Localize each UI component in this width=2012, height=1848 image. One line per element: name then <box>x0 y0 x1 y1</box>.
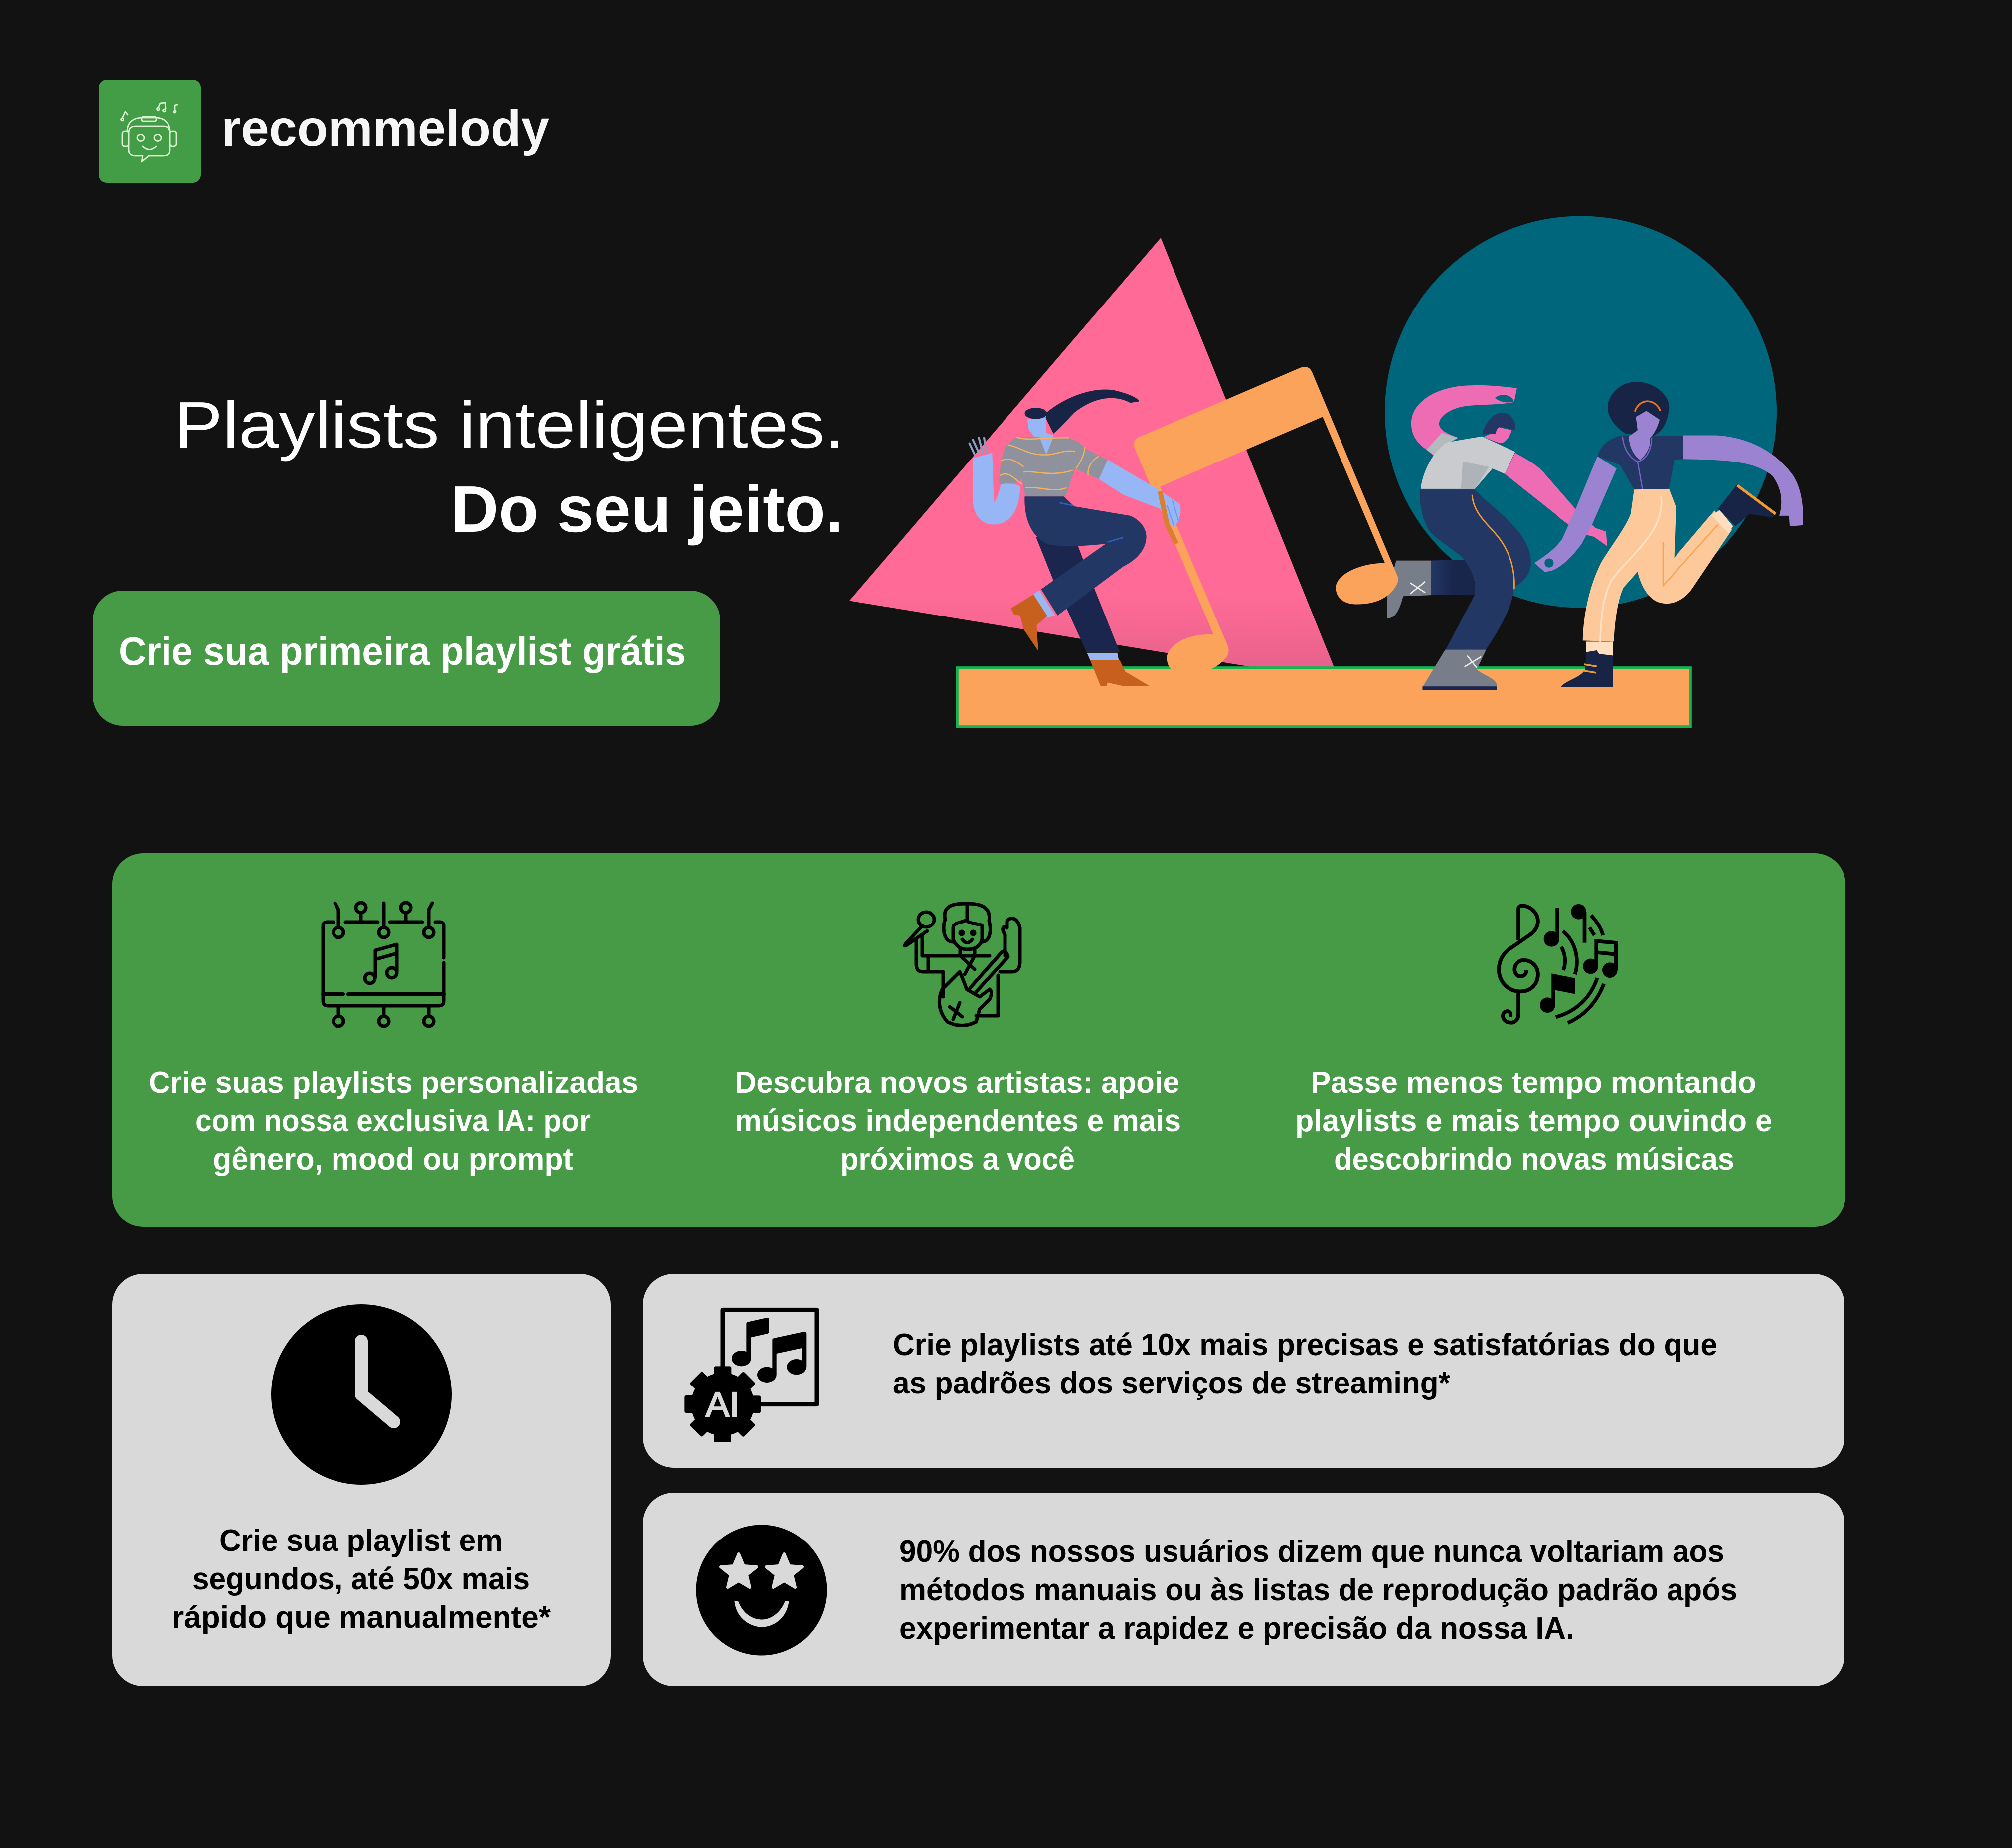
benefit text: new artists: próximos a você <box>840 1142 1075 1177</box>
hero illustration <box>849 216 1803 727</box>
icon: circuit board with music note <box>323 903 444 1026</box>
satisfaction text: 90% dos nossos usuários dizem que nunca voltariam aos <box>899 1535 1724 1569</box>
benefit text: new artists <box>735 1066 1181 1177</box>
teal circle <box>1385 216 1777 608</box>
panel: accuracy stat <box>643 1274 1844 1468</box>
benefit text: personalized playlists: gênero, mood ou prompt <box>213 1142 573 1177</box>
satisfaction text <box>899 1535 1737 1646</box>
headline <box>174 388 844 546</box>
icon: AI gear with music notes: AI <box>705 1385 740 1424</box>
accuracy text: as padrões dos serviços de streaming* <box>893 1366 1451 1400</box>
dancing man <box>1387 385 1607 690</box>
benefit text: personalized playlists: Crie suas playlists personalizadas <box>149 1066 638 1100</box>
benefit text: less time: playlists e mais tempo ouvindo e <box>1295 1104 1772 1138</box>
speed text: Crie sua playlist em <box>219 1524 503 1558</box>
orange stage platform <box>957 668 1690 727</box>
icon: treble clef and notes <box>1499 904 1618 1023</box>
dancing woman with afro <box>1534 382 1803 687</box>
orange music note <box>1134 367 1398 675</box>
benefit text: personalized playlists: com nossa exclusiva IA: por <box>195 1104 591 1138</box>
logo wordmark: recommelody <box>221 100 549 156</box>
headline: Playlists inteligentes. <box>174 388 844 462</box>
satisfaction text: métodos manuais ou às listas de reprodução padrão após <box>899 1573 1737 1607</box>
satisfaction text: experimentar a rapidez e precisão da nossa IA. <box>899 1611 1574 1646</box>
accuracy text <box>893 1328 1717 1400</box>
call to action button: Crie sua primeira playlist grátis <box>119 629 686 673</box>
logo badge <box>99 80 201 183</box>
icon: AI gear with music notes <box>684 1310 817 1442</box>
headline: Do seu jeito. <box>451 472 843 546</box>
benefit text: less time: descobrindo novas músicas <box>1334 1142 1734 1177</box>
speed text: segundos, até 50x mais <box>192 1562 530 1596</box>
benefit text: new artists: músicos independentes e mais <box>735 1104 1181 1138</box>
panel: green benefits <box>112 853 1845 1227</box>
dancing woman with ponytail <box>970 389 1180 686</box>
call to action button <box>93 591 720 726</box>
benefit text: less time <box>1295 1066 1772 1177</box>
icon: star-eyed smiley <box>696 1525 827 1656</box>
benefit text: personalized playlists <box>149 1066 638 1177</box>
panel: satisfaction stat <box>643 1493 1844 1686</box>
logo <box>99 80 549 183</box>
pink triangle <box>849 238 1340 681</box>
benefit text: new artists: Descubra novos artistas: apoie <box>735 1066 1179 1100</box>
speed text <box>172 1524 551 1635</box>
accuracy text: Crie playlists até 10x mais precisas e satisfatórias do que <box>893 1328 1717 1362</box>
benefit text: less time: Passe menos tempo montando <box>1311 1066 1756 1100</box>
panel: speed stat <box>112 1274 611 1686</box>
icon: singer with guitar <box>905 904 1020 1026</box>
icon: clock <box>271 1304 452 1485</box>
speed text: rápido que manualmente* <box>172 1600 551 1635</box>
